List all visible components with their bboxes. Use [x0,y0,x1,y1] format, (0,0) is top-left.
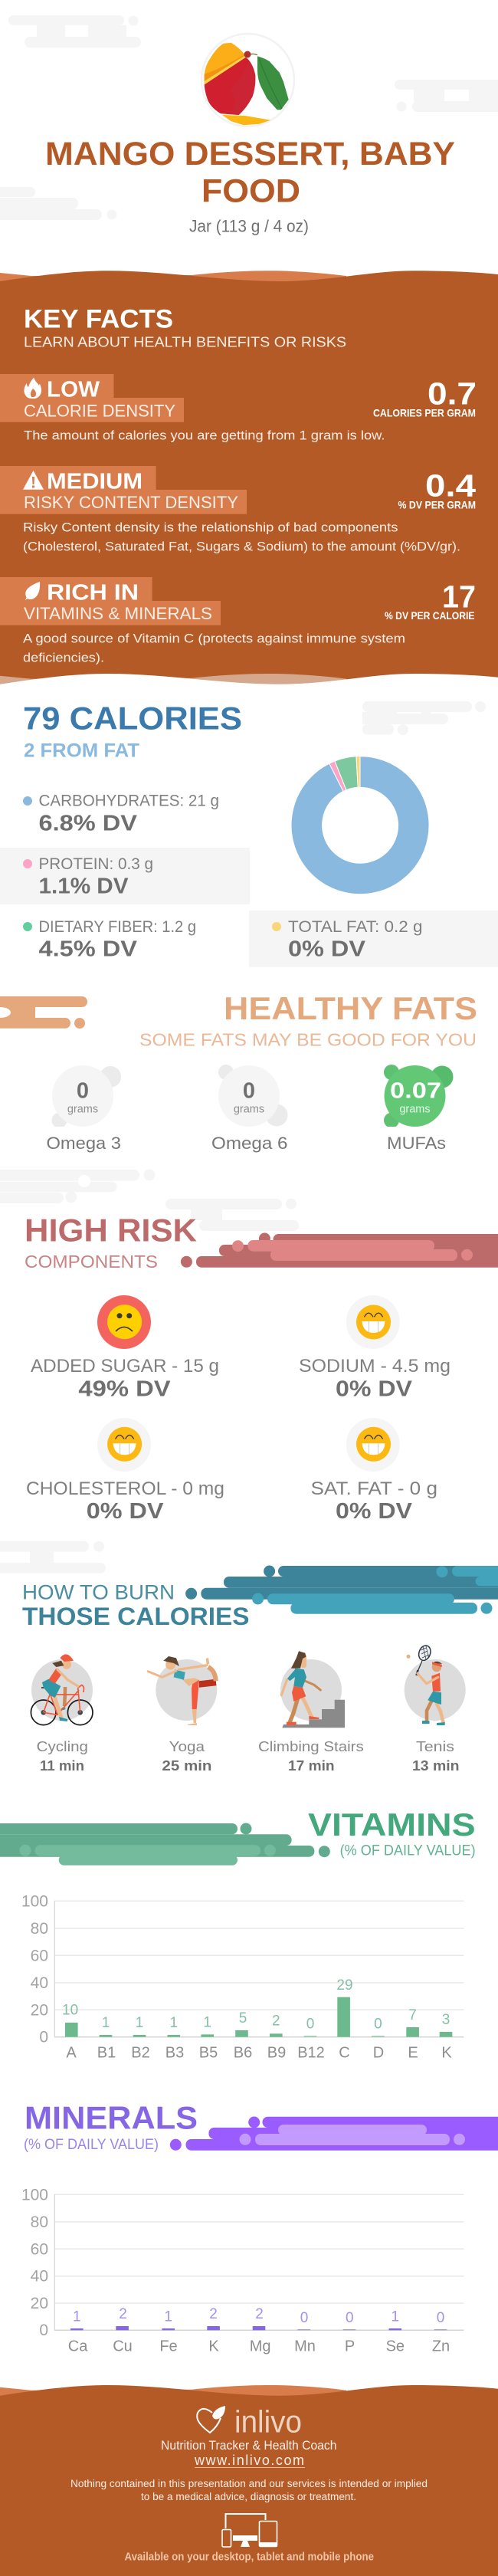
bar chart: minerals: 2 [119,2306,127,2322]
item: saturated fat: SAT. FAT - 0 g [311,1478,437,1499]
card: low calorie density: CALORIE DENSITY [24,401,175,420]
bar chart: minerals: 80 [31,2213,48,2231]
bubble: omega 3 [46,1065,121,1153]
card: rich in vitamins and minerals: VITAMINS & MINERALS [24,604,212,623]
item: sodium: SODIUM - 4.5 mg [299,1356,450,1377]
bar chart: minerals: 100 [21,2186,48,2204]
bar chart: vitamins: 80 [31,1920,48,1938]
bar chart: vitamins: 40 [31,1974,48,1992]
activity: cycling: Cycling [37,1738,88,1754]
bar chart: vitamins: 7 [408,2007,417,2023]
panel: how to burn those calories [22,1565,498,1774]
heading: calories: 79 CALORIES [23,701,242,737]
subheading: daily value: (% OF DAILY VALUE) [340,1843,476,1859]
card: rich in vitamins and minerals: deficiencies). [23,651,104,665]
bubble: mufas: 0.07 [390,1078,441,1103]
bar chart: vitamins: 0 [374,2016,382,2033]
panel: footer [0,2385,498,2576]
card: rich in vitamins and minerals: A good source of Vitamin C (protects against immune system [23,632,405,645]
card: rich in vitamins and minerals [0,577,476,665]
legend: dietary fiber [23,918,196,961]
bar chart: vitamins: B12 [297,2044,325,2061]
bar chart: vitamins: 0 [39,2028,48,2046]
card: low calorie density: LOW [47,378,100,402]
card: medium risky content density: RISKY CONTENT DENSITY [24,493,238,512]
bar chart: vitamins: B1 [97,2044,116,2061]
card: low calorie density [0,374,477,442]
bubble: omega 6: 0 [243,1078,255,1103]
icon: leaf [25,582,40,600]
bar chart: vitamins: B6 [234,2044,252,2061]
bar chart: minerals: 1 [164,2309,172,2325]
activity: climbing stairs: 17 min [288,1757,335,1774]
bar chart: minerals: K [208,2338,219,2355]
bubble: mufas [384,1065,454,1153]
bar chart: minerals: 40 [31,2268,48,2286]
background cloud: calories [362,701,486,735]
bar chart: vitamins: B2 [131,2044,150,2061]
serving size: Jar (113 g / 4 oz) [189,217,309,236]
bubble: omega 3: grams [67,1104,98,1116]
bar chart: vitamins: 1 [170,2015,178,2031]
bar chart: minerals: Zn [432,2338,450,2355]
legend: protein: 1.1% DV [38,874,129,898]
bubble: omega 6: Omega 6 [211,1134,288,1153]
bar chart: minerals [21,2186,464,2355]
legend: carbohydrates [23,792,219,835]
bar chart: vitamins [21,1893,464,2061]
activity: climbing stairs: Climbing Stairs [258,1738,364,1754]
bar chart: vitamins: B5 [199,2044,218,2061]
bar chart: vitamins: 3 [442,2012,450,2028]
heading: minerals: MINERALS [25,2099,198,2135]
decorative band: burn [185,1565,498,1614]
legend: protein: PROTEIN: 0.3 g [38,855,153,873]
bar chart: minerals: 0 [346,2310,354,2326]
subheading: daily value: (% OF DAILY VALUE) [24,2136,159,2153]
item: saturated fat [311,1418,437,1524]
heading: high risk: HIGH RISK [25,1212,197,1248]
background cloud: burn [0,1541,106,1573]
panel: minerals [21,2099,498,2355]
icon: mango photo [201,34,294,126]
title [45,136,455,210]
activity: tennis [405,1644,466,1774]
legend: carbohydrates: CARBOHYDRATES: 21 g [38,792,219,810]
activity: climbing stairs [258,1651,364,1774]
bar chart: vitamins: C [339,2044,350,2061]
legend: total fat: TOTAL FAT: 0.2 g [288,918,423,936]
logo wordmark: inlivo [234,2404,302,2439]
bar chart: vitamins: D [373,2044,384,2061]
card: medium risky content density: Risky Content density is the relationship of bad components [23,521,398,535]
item: sodium: 0% DV [336,1377,413,1402]
decorative band: vitamins [0,1823,330,1866]
decorative cloud band [0,996,87,1029]
bar chart: minerals: 20 [31,2295,48,2312]
website link: www.inlivo.com [194,2453,304,2468]
panel: calories [0,701,498,967]
card: low calorie density: 0.7 [428,376,477,411]
heading: key facts: KEY FACTS [24,305,173,334]
activity: yoga: Yoga [169,1738,205,1754]
card: rich in vitamins and minerals: 17 [442,579,476,614]
icon: devices [222,2514,277,2547]
tagline: Nutrition Tracker & Health Coach [161,2438,337,2453]
legend: total fat [249,911,498,967]
subheading: SOME FATS MAY BE GOOD FOR YOU [139,1029,477,1049]
item: cholesterol: 0% DV [87,1499,164,1524]
card: medium risky content density [0,466,476,554]
title: FOOD [201,173,300,210]
bar chart: vitamins: 1 [136,2015,143,2031]
bubble: mufas: grams [399,1104,431,1116]
bar chart: vitamins: 5 [239,2010,247,2026]
heading: how to burn: HOW TO BURN [22,1581,175,1604]
bar chart: vitamins: 10 [62,2002,78,2018]
card: low calorie density: CALORIES PER GRAM [373,406,476,418]
bar chart: vitamins: B9 [267,2044,286,2061]
activity: yoga [148,1656,217,1774]
bar chart: minerals: Fe [159,2338,178,2355]
legend: dietary fiber: 4.5% DV [38,937,138,961]
icon: flame [24,378,41,399]
bar chart: minerals: Cu [113,2338,133,2355]
bar chart: vitamins: 100 [21,1893,48,1911]
card: medium risky content density: 0.4 [425,468,476,504]
bar chart: minerals: 0 [39,2322,48,2339]
disclaimer [70,2478,428,2502]
bar chart: vitamins: 20 [31,2001,48,2019]
item: added sugar: 49% DV [78,1377,171,1402]
background clouds: header [0,15,498,220]
activity: yoga: 25 min [162,1757,211,1774]
activity: tennis: Tenis [416,1738,454,1754]
card: medium risky content density: % DV PER GRAM [398,498,476,510]
item: added sugar: ADDED SUGAR - 15 g [31,1356,219,1377]
subheading: calories from fat: 2 FROM FAT [24,740,139,761]
item: added sugar [31,1295,219,1402]
card: rich in vitamins and minerals: RICH IN [47,580,139,605]
card: low calorie density: The amount of calories you are getting from 1 gram is low. [24,428,385,442]
title: MANGO DESSERT, BABY [45,136,455,172]
bar chart: minerals: 1 [392,2309,399,2325]
bar chart: minerals: 0 [437,2310,444,2326]
bar chart: vitamins: 29 [336,1977,353,1994]
bar chart: vitamins: 0 [306,2016,314,2033]
heading: healthy fats: HEALTHY FATS [224,990,477,1026]
disclaimer: to be a medical advice, diagnosis or treatment. [141,2491,356,2502]
availability note: Available on your desktop, tablet and mobile phone [124,2551,374,2564]
bar chart: vitamins: K [441,2044,452,2061]
item: saturated fat: 0% DV [336,1499,413,1524]
disclaimer: Nothing contained in this presentation and our services is intended or implied [70,2478,428,2489]
bar chart: minerals: Se [386,2338,405,2355]
heading: those calories: THOSE CALORIES [22,1603,250,1630]
legend: total fat: 0% DV [288,937,366,961]
activity: cycling [31,1654,93,1774]
card: rich in vitamins and minerals: % DV PER CALORIE [385,609,475,622]
bubble: omega 3: 0 [77,1078,89,1103]
bar chart: vitamins: 1 [102,2015,110,2031]
subheading: components: COMPONENTS [25,1252,158,1272]
card: medium risky content density: MEDIUM [47,470,143,494]
activity: cycling: 11 min [40,1757,84,1774]
activity: tennis: 13 min [412,1757,460,1774]
card: medium risky content density: (Cholesterol, Saturated Fat, Sugars & Sodium) to the amount (%DV/gr). [23,540,460,554]
panel: high risk components [25,1212,498,1524]
decorative band: minerals [170,2117,498,2151]
item: cholesterol: CHOLESTEROL - 0 mg [26,1478,224,1499]
bar chart: vitamins: 60 [31,1947,48,1964]
bar chart: minerals: 2 [255,2306,264,2322]
logo: inlivo heart [197,2406,225,2433]
bar chart: vitamins: 2 [272,2013,280,2030]
legend: carbohydrates: 6.8% DV [38,811,138,835]
bar chart: vitamins: A [66,2044,77,2061]
item: cholesterol [26,1418,224,1524]
bar chart: minerals: 2 [209,2306,218,2322]
bar chart: minerals: Mn [294,2338,316,2355]
bubble: omega 3: Omega 3 [46,1134,121,1153]
legend: dietary fiber: DIETARY FIBER: 1.2 g [38,918,196,936]
background clouds: high risk [0,1170,299,1231]
legend: protein [0,848,250,904]
panel: key facts [0,271,498,694]
heading: vitamins: VITAMINS [308,1806,476,1843]
bubble: mufas: MUFAs [387,1134,446,1153]
bar chart: minerals: Mg [250,2338,270,2355]
panel: healthy fats [0,990,477,1153]
bar chart: minerals: 60 [31,2240,48,2258]
bubble: omega 6 [211,1065,288,1153]
bubble: omega 6: grams [234,1104,264,1116]
bar chart: minerals: P [345,2338,355,2355]
bar chart: vitamins: 1 [203,2014,211,2031]
bar chart: vitamins: E [408,2044,418,2061]
bar chart: minerals: 1 [73,2309,81,2325]
icon: warning triangle [23,471,44,490]
bar chart: minerals: 0 [300,2310,308,2326]
donut chart [291,756,429,894]
item: sodium [299,1295,450,1402]
decorative band: high risk [181,1232,498,1268]
subheading: LEARN ABOUT HEALTH BENEFITS OR RISKS [24,334,346,350]
bar chart: minerals: Ca [68,2338,88,2355]
bar chart: vitamins: B3 [165,2044,184,2061]
panel: vitamins [0,1806,476,2061]
